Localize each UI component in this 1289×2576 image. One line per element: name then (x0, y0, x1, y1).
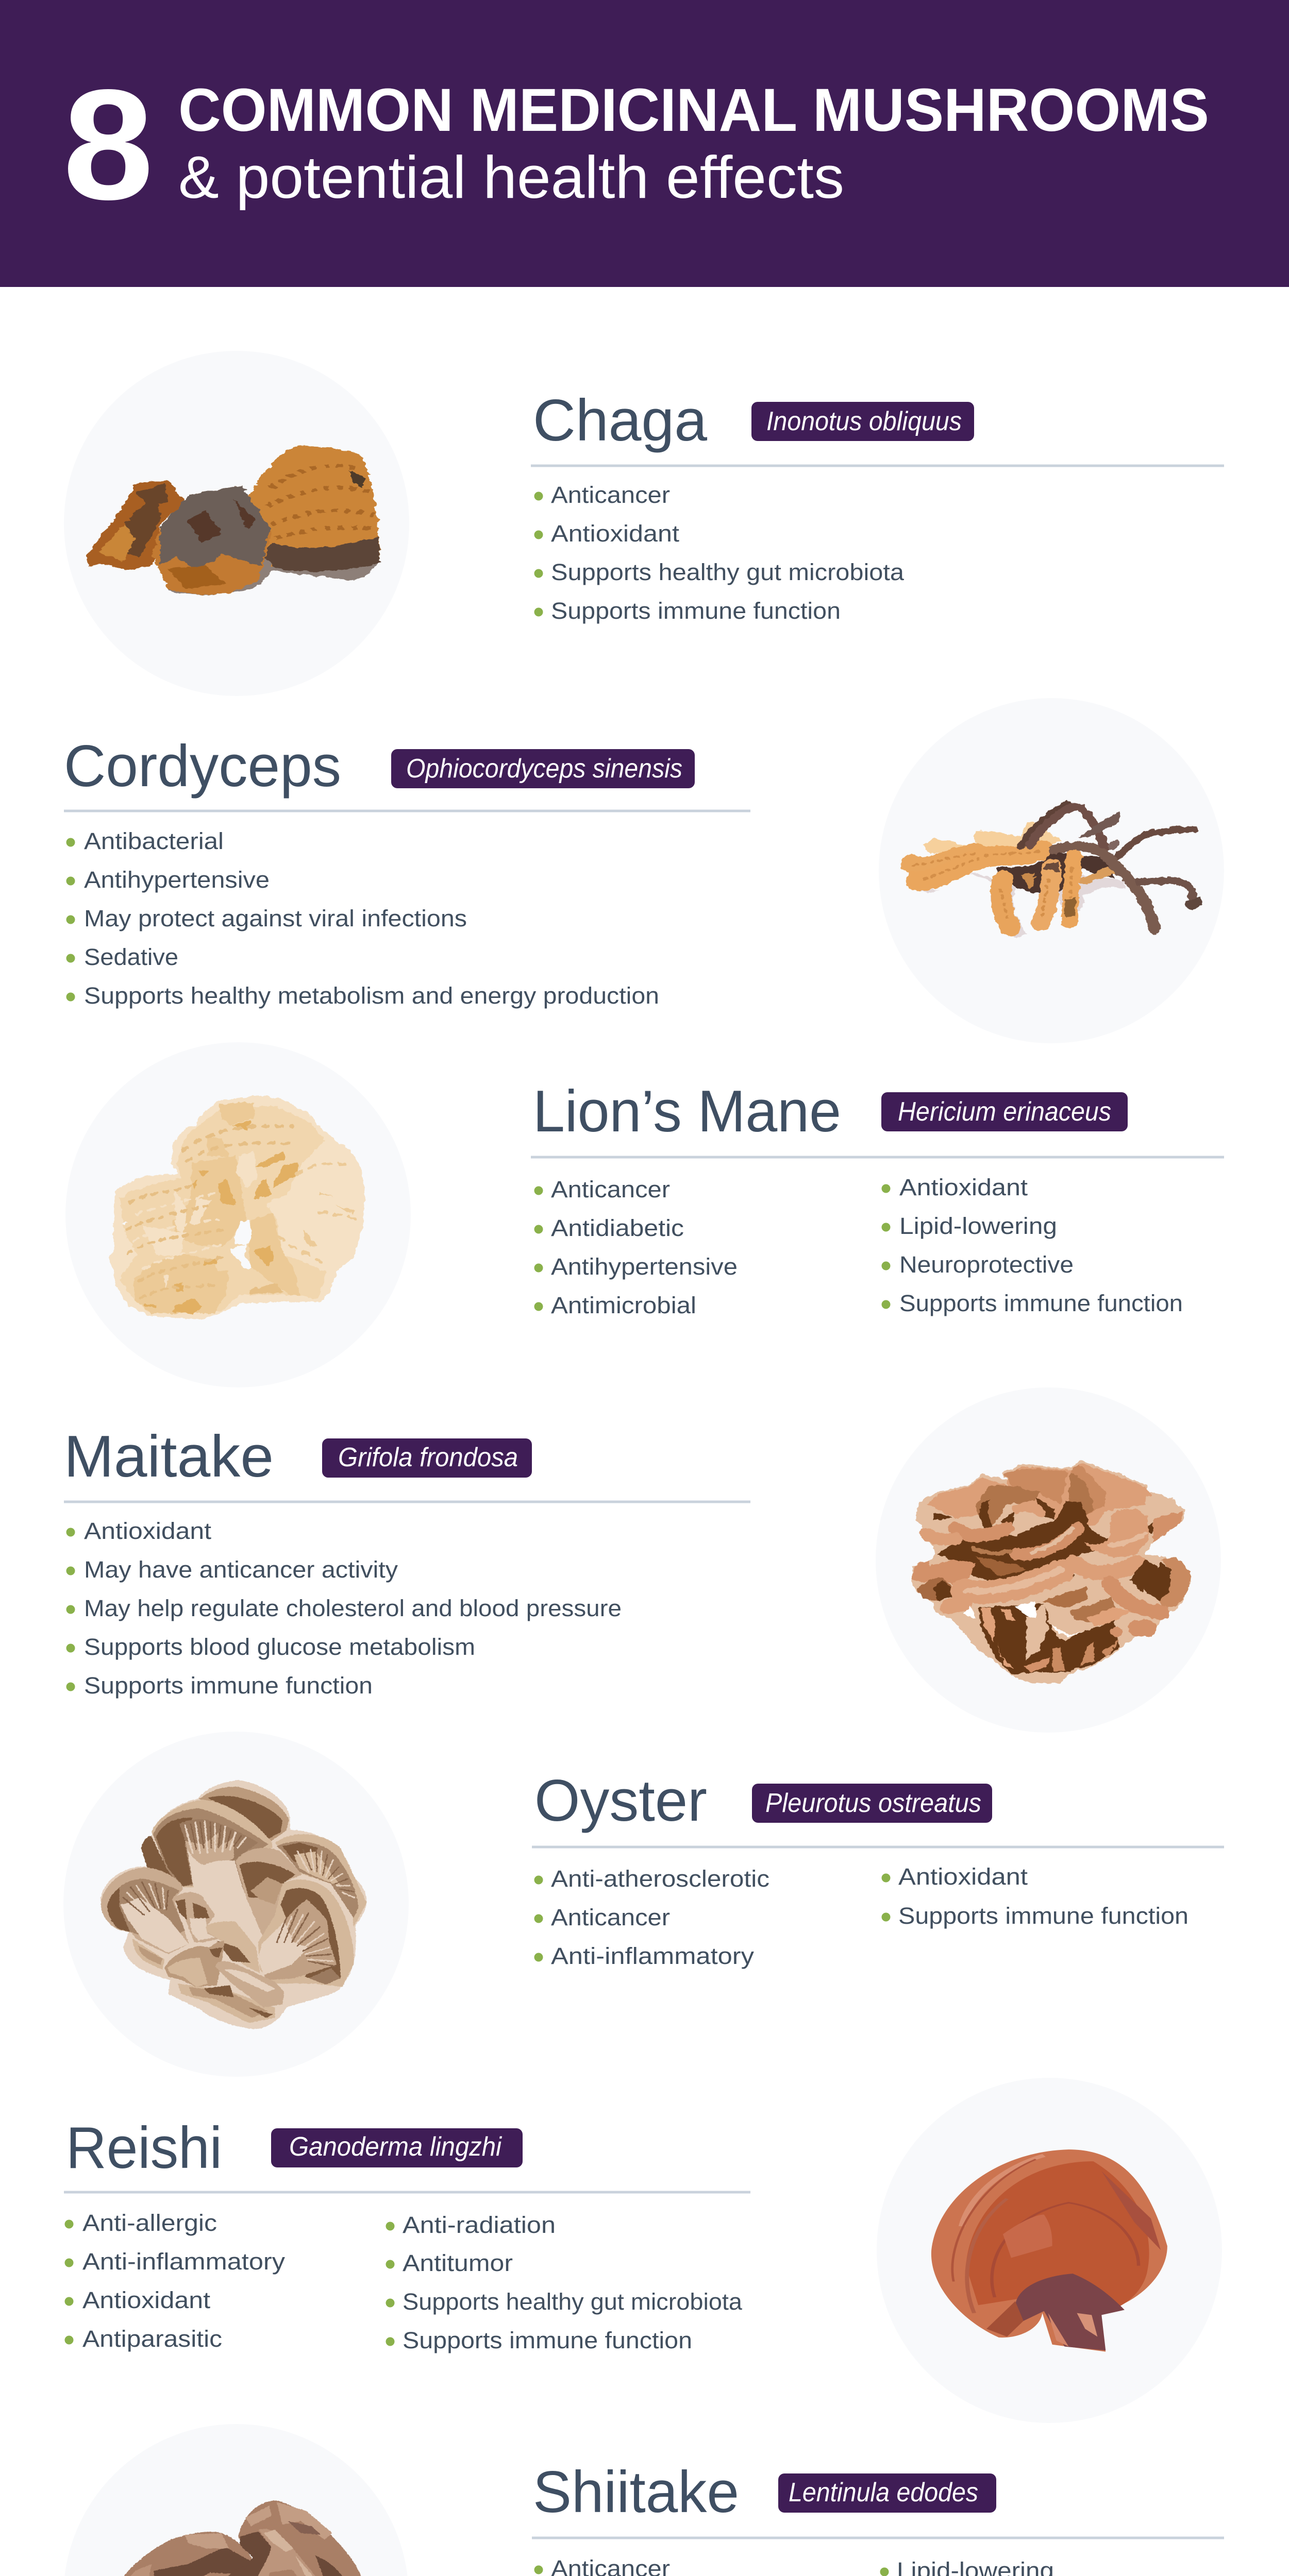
list of effects: May help regulate cholesterol and blood pressure (84, 1595, 622, 1621)
circle backdrop (876, 1387, 1221, 1733)
list of effects: Supports healthy gut microbiota (551, 559, 905, 585)
species badge: Grifola frondosa (338, 1443, 518, 1472)
list of effects: Supports immune function (84, 1672, 373, 1699)
heading: Reishi (66, 2115, 222, 2181)
list of effects: Supports healthy gut microbiota (403, 2289, 743, 2315)
list of effects: Neuroprotective (899, 1251, 1074, 1278)
illustration: reishi (931, 2149, 1167, 2352)
big number 8: 8 (63, 57, 154, 232)
panel: Lion's Mane (65, 1042, 1224, 1387)
panel: Chaga (64, 351, 1224, 696)
list of effects: Antihypertensive (551, 1253, 738, 1280)
circle backdrop (63, 2424, 409, 2576)
heading: Chaga (533, 388, 708, 453)
list of effects: Supports blood glucose metabolism (84, 1634, 475, 1660)
species badge (271, 2128, 523, 2167)
list of effects: Antioxidant (551, 520, 680, 547)
illustration: oyster (101, 1780, 367, 2029)
list of effects: Antimicrobial (551, 1292, 696, 1318)
list of effects: Anti-inflammatory (82, 2248, 286, 2275)
species badge: Lentinula edodes (789, 2478, 978, 2507)
list of effects: May protect against viral infections (84, 905, 467, 931)
title: COMMON MEDICINAL MUSHROOMS (178, 76, 1209, 144)
heading: Cordyceps (64, 734, 341, 799)
panel: Oyster (63, 1732, 1224, 2077)
panel: Reishi (64, 2078, 1222, 2423)
illustration: cordyceps (912, 804, 1202, 938)
illustration: shiitake (104, 2500, 371, 2576)
heading: Lion’s Mane (533, 1079, 841, 1144)
list of effects: Anti-atherosclerotic (551, 1866, 769, 1892)
circle backdrop (63, 1732, 409, 2077)
circle backdrop (64, 351, 409, 696)
list of effects: Lipid-lowering (899, 1213, 1057, 1239)
species badge: Hericium erinaceus (898, 1097, 1111, 1127)
list of effects: Supports immune function (551, 598, 841, 624)
list of effects: Anticancer (551, 1176, 670, 1202)
list of effects (534, 1174, 1183, 1318)
list of effects: Antioxidant (84, 1518, 212, 1544)
panel: Cordyceps (64, 698, 1224, 1043)
panel: Shiitake (63, 2424, 1224, 2576)
illustration: maitake (911, 1460, 1191, 1684)
list of effects: May have anticancer activity (84, 1556, 398, 1583)
heading: Shiitake (533, 2460, 739, 2525)
list of effects: Anti-radiation (403, 2212, 556, 2238)
list of effects (534, 482, 905, 624)
list of effects: Antioxidant (899, 1174, 1028, 1200)
list of effects: Antioxidant (82, 2287, 211, 2313)
panel: Maitake (64, 1387, 1221, 1733)
list of effects: Antitumor (403, 2250, 513, 2276)
list of effects: Sedative (84, 944, 178, 970)
list of effects: Antihypertensive (84, 867, 270, 893)
subtitle: & potential health effects (178, 144, 844, 211)
species badge (322, 1438, 532, 1478)
illustration: chaga (85, 445, 380, 595)
list of effects (66, 1518, 622, 1699)
circle backdrop (879, 698, 1224, 1043)
species badge: Inonotus obliquus (766, 406, 962, 436)
list of effects: Antibacterial (84, 828, 224, 854)
heading: Oyster (534, 1768, 707, 1834)
species badge: Ophiocordyceps sinensis (406, 754, 682, 784)
list of effects: Supports immune function (898, 1903, 1188, 1929)
circle backdrop (65, 1042, 411, 1387)
list of effects: Anticancer (551, 482, 670, 508)
list of effects: Supports immune function (899, 1290, 1183, 1316)
list of effects: Antidiabetic (551, 1215, 684, 1241)
list of effects: Antioxidant (898, 1863, 1028, 1890)
illustration: lion's mane (110, 1097, 364, 1318)
list of effects (534, 1863, 1188, 1969)
list of effects (65, 2210, 743, 2353)
list of effects: Anti-inflammatory (551, 1943, 755, 1969)
list of effects: Supports healthy metabolism and energy production (84, 982, 659, 1009)
header banner (0, 0, 1289, 287)
list of effects (534, 2555, 1186, 2576)
list of effects (66, 828, 659, 1009)
list of effects: Antiparasitic (82, 2326, 222, 2352)
list of effects: Anticancer (551, 1904, 670, 1930)
species badge: Pleurotus ostreatus (765, 1788, 981, 1818)
circle backdrop (877, 2078, 1222, 2423)
list of effects: Anti-allergic (82, 2210, 217, 2236)
list of effects: Supports immune function (403, 2327, 692, 2353)
species badge: Ganoderma lingzhi (289, 2132, 502, 2162)
heading: Maitake (64, 1424, 274, 1489)
